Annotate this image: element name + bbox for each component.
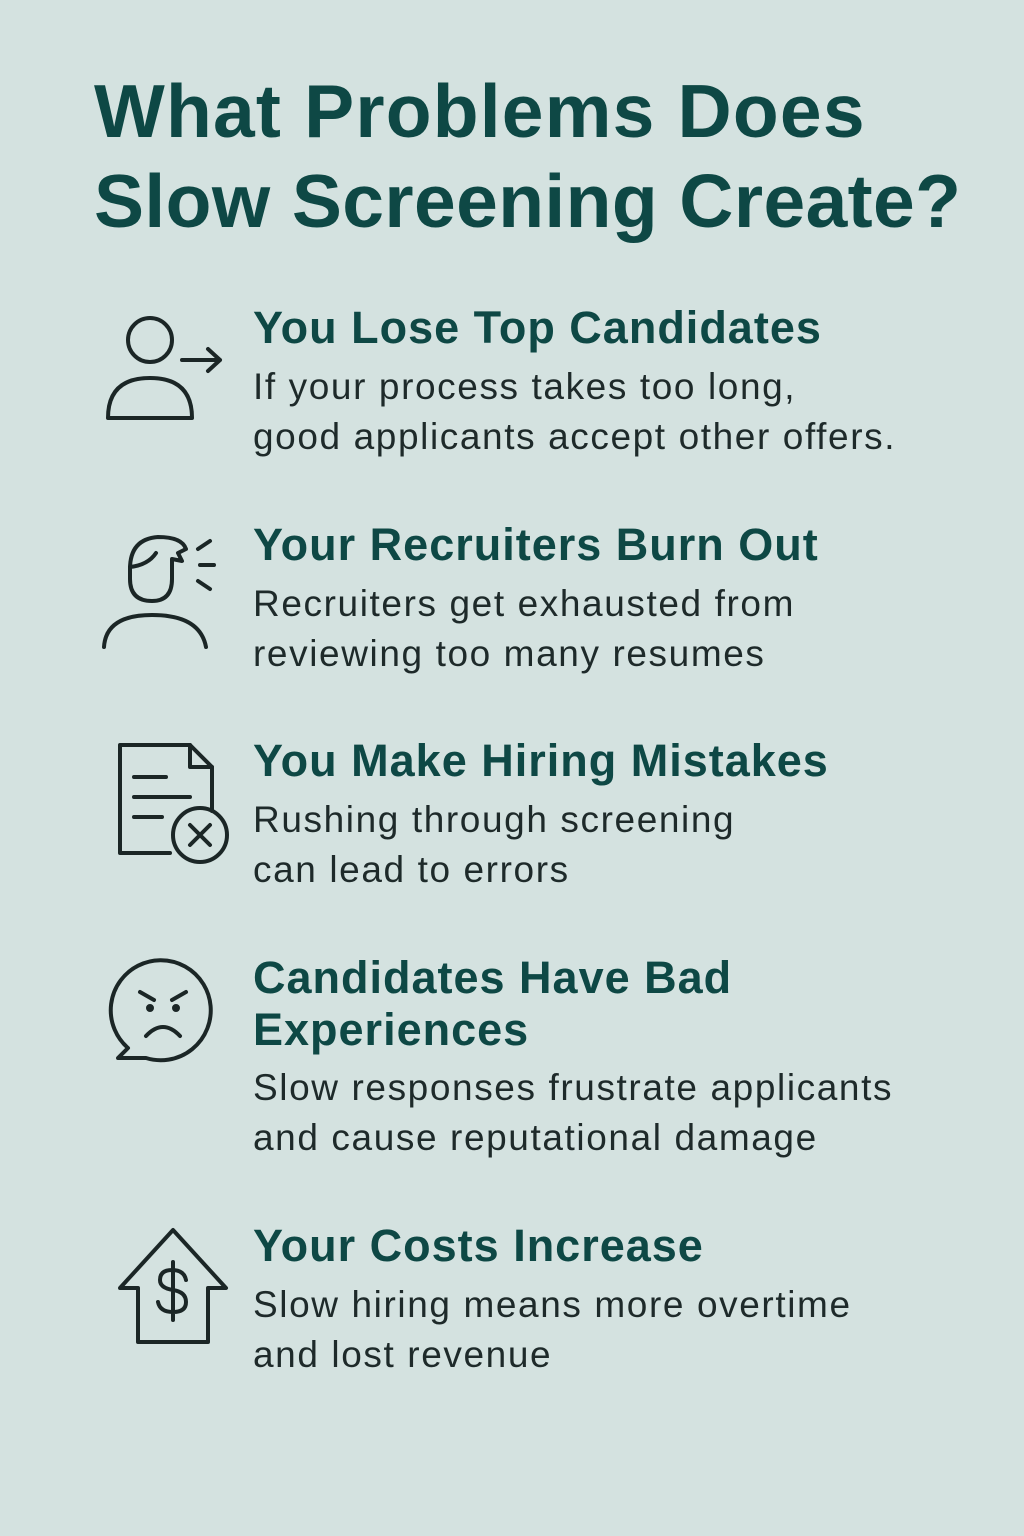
heading: Your Recruiters Burn Out: [253, 519, 819, 570]
body text: [253, 1284, 852, 1375]
heading: Experiences: [253, 1004, 529, 1055]
body text: [253, 366, 896, 457]
title: [94, 69, 961, 243]
heading: You Make Hiring Mistakes: [253, 735, 829, 786]
body text: and cause reputational damage: [253, 1117, 818, 1158]
body text: and lost revenue: [253, 1334, 552, 1375]
body text: Slow hiring means more overtime: [253, 1284, 852, 1325]
heading: [253, 952, 732, 1055]
body text: can lead to errors: [253, 849, 570, 890]
icon: stressed recruiter: [102, 535, 216, 649]
heading: Candidates Have Bad: [253, 952, 732, 1003]
body text: [253, 1067, 893, 1158]
title: Slow Screening Create?: [94, 159, 961, 243]
icon: angry speech bubble: [108, 958, 213, 1062]
body text: If your process takes too long,: [253, 366, 796, 407]
item: hiring mistakes: [118, 735, 829, 890]
body text: reviewing too many resumes: [253, 633, 766, 674]
heading: Your Costs Increase: [253, 1220, 704, 1271]
body text: Rushing through screening: [253, 799, 735, 840]
item: lose top candidates: [106, 302, 896, 457]
body text: good applicants accept other offers.: [253, 416, 896, 457]
body text: Recruiters get exhausted from: [253, 583, 795, 624]
body text: [253, 799, 735, 890]
icon: document with x: [118, 743, 229, 864]
heading: You Lose Top Candidates: [253, 302, 822, 353]
icon: person leaving: [106, 316, 222, 420]
icon: dollar house arrow: [118, 1228, 228, 1344]
body text: Slow responses frustrate applicants: [253, 1067, 893, 1108]
title: What Problems Does: [94, 69, 866, 153]
body text: [253, 583, 795, 674]
item: recruiters burn out: [102, 519, 819, 674]
item: candidate experience: [108, 952, 893, 1158]
item: costs increase: [118, 1220, 852, 1375]
